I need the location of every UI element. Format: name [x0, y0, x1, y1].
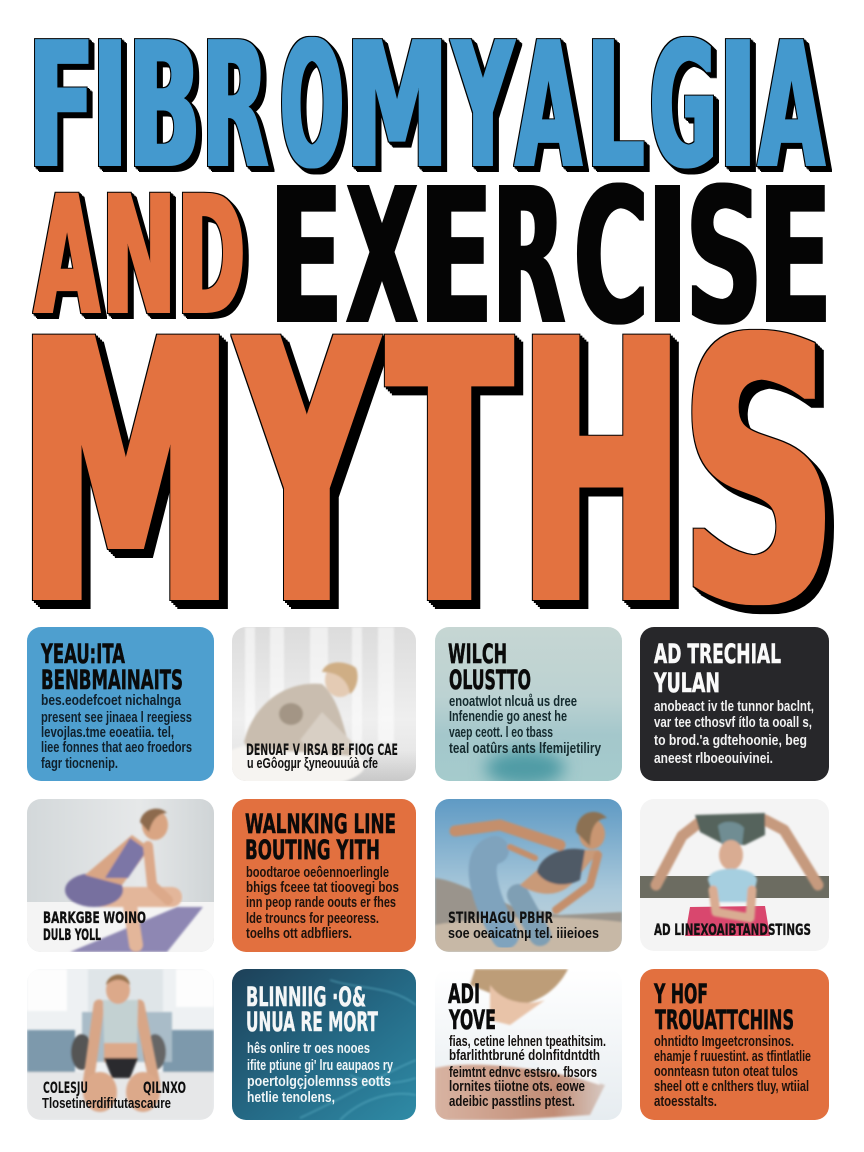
title word: EXERCISE: I: [647, 148, 688, 367]
body text: [449, 1033, 606, 1110]
overlay caption: [44, 911, 146, 940]
body text: var tee cthosvf ítlo ta ooall s,: [654, 714, 812, 731]
body text: feimtnt ednvc estsro. fbsors: [449, 1064, 597, 1081]
title word: AND: [35, 160, 245, 353]
title word: MYTHS: S: [682, 263, 836, 687]
body text: to brod.'a gdtehoonie, beg: [654, 732, 807, 749]
overlay caption: soe oeaicatnµ tel. iiieioes: [448, 925, 599, 942]
title word: EXERCISE: E: [758, 149, 832, 367]
overlay caption: [42, 1078, 186, 1112]
overlay caption: [246, 744, 398, 771]
overlay caption: DULB YOLL: [43, 925, 101, 944]
overlay caption: u eGôogµr ξyneouuúà cfe: [247, 755, 378, 772]
title line: FIBROMYALGIA: A: [516, 6, 581, 208]
body text: teal oatûrs ants lfemijetiliry: [449, 740, 602, 757]
photo: woman kneeling: [83, 974, 160, 1112]
title: [18, 4, 836, 687]
title line: FIBROMYALGIA: G: [650, 6, 717, 208]
heading: UNUA RE MORT: [246, 1007, 378, 1038]
body text: bhigs fceee tat tioovegi bos: [246, 879, 399, 896]
heading: BOUTING YITH: [245, 835, 380, 866]
title line: FIBROMYALGIA: [28, 4, 824, 208]
panel: stretching outdoors photo card: [435, 799, 622, 952]
body text: [246, 864, 399, 942]
heading: BENBMAINAITS: [41, 665, 183, 696]
title word: MYTHS: T: [389, 262, 511, 686]
heading: [653, 979, 794, 1036]
panel: kneeling photo card: [27, 969, 214, 1120]
body text: Infenendie go anest he: [449, 708, 567, 725]
title word: AND: A: [35, 160, 99, 352]
body text: adeibic passtlins ptest.: [449, 1093, 575, 1110]
title word: AND: N: [102, 161, 176, 353]
panel: neck and shoulder photo card: [435, 969, 622, 1120]
panel: seated bend photo card: [27, 799, 214, 952]
title word: EXERCISE: C: [574, 148, 648, 367]
overlay caption: DENUAF V IRSA BF FIOG CAE: [246, 740, 398, 759]
body text: [654, 698, 814, 767]
photo: person in pose: [656, 813, 818, 918]
heading: YOVE: [448, 1005, 496, 1036]
photo: room with drawers and floor: [27, 969, 214, 1120]
body text: sheel ott e cnlthers tluy, wtiial: [654, 1078, 809, 1095]
photo: exercise band: [640, 876, 829, 898]
title word: AND: D: [178, 160, 245, 352]
title line: FIBROMYALGIA: R: [202, 6, 268, 208]
body text: levojlas.tme eoeatiia. tel,: [41, 724, 174, 741]
heading: [40, 639, 183, 696]
title line: FIBROMYALGIA: F: [28, 6, 95, 208]
photo: mountains and sand: [435, 878, 622, 952]
photo: water patch: [485, 750, 565, 786]
overlay caption: BARKGBE WOINO: [43, 908, 146, 927]
heading: WILCH: [448, 639, 507, 670]
title line: FIBROMYALGIA: I: [92, 6, 128, 208]
body text: hês onlire tr oes nooes: [247, 1040, 370, 1057]
body text: bes.eodefcoet nichalnga: [41, 692, 182, 709]
photo: curtains: [245, 627, 394, 742]
body text: [449, 693, 602, 757]
body text: inn peop rande oouts er fhes: [246, 894, 396, 911]
title word: EXERCISE: S: [686, 149, 762, 368]
body text: hetlie tenolens,: [247, 1089, 335, 1106]
panel: blue myth card: [27, 627, 214, 781]
photo: pink mat: [685, 906, 770, 936]
photo: woman's neck and back: [435, 969, 605, 1120]
title word: EXERCISE: E: [419, 149, 493, 367]
title line: FIBROMYALGIA: O: [280, 5, 344, 208]
panel: woman resting photo card: [232, 627, 416, 781]
body text: liee fonnes that aeo froedors: [41, 739, 192, 756]
panel: water texture card: [435, 627, 622, 786]
body text: poertolgçjolemnss eotts: [247, 1073, 391, 1090]
photo: woman: [232, 661, 366, 781]
heading: [245, 809, 396, 866]
panel: dark card: [640, 627, 829, 781]
heading: ADI: [448, 979, 480, 1010]
panel: orange stretching card: [640, 969, 829, 1120]
body text: boodtaroe oeôennoerlingle: [246, 864, 389, 881]
title line: FIBROMYALGIA: Y: [451, 6, 515, 208]
photo: water ripples: [300, 980, 416, 1120]
body text: [41, 692, 192, 772]
title word: MYTHS: H: [520, 262, 683, 686]
body text: lornites tiiotne ots. eowe: [449, 1078, 585, 1095]
heading: OLUSTTO: [449, 665, 531, 696]
overlay caption: QILNXO: [143, 1078, 186, 1097]
body text: fagr tiocnenip.: [41, 755, 118, 772]
overlay caption: [448, 912, 598, 941]
heading: [246, 982, 378, 1038]
heading: YEAU:ITA: [40, 639, 125, 670]
heading: AD TRECHIAL: [654, 639, 781, 670]
title line: FIBROMYALGIA: A: [759, 6, 824, 208]
heading: [448, 979, 496, 1036]
body text: present see jinaea l reegiess: [41, 709, 192, 726]
heading: BLINNIIG ·O&: [246, 982, 366, 1013]
heading: WALNKING LINE: [245, 809, 396, 840]
body text: fias, cetine lehnen tpeathitsim.: [449, 1033, 606, 1050]
title line: FIBROMYALGIA: M: [346, 4, 449, 207]
title word: EXERCISE: R: [492, 149, 565, 367]
title word: EXERCISE: X: [346, 147, 418, 366]
body text: [654, 1033, 811, 1110]
body text: [247, 1040, 393, 1106]
body text: vaep ceott. l eo tbass: [449, 724, 553, 741]
heading: Y HOF: [653, 979, 708, 1010]
title line: FIBROMYALGIA: L: [587, 4, 644, 207]
body text: ifite ptiune gi' lru eaupaos ry: [247, 1057, 393, 1074]
body text: bfarlithtbruné dolnfitdntdth: [449, 1047, 600, 1064]
body text: lde trouncs for peeoress.: [246, 910, 379, 927]
body text: toelhs ott adbfliers.: [246, 925, 352, 942]
body text: aneest rlboeouivinei.: [654, 750, 773, 767]
panel: flexible pose photo card: [640, 799, 829, 951]
body text: enoatwlot nlcuå us dree: [449, 693, 577, 710]
heading: [653, 639, 781, 699]
panel: orange walking card: [232, 799, 416, 952]
body text: anobeact iv tle tunnor baclnt,: [654, 698, 814, 715]
photo: mat: [70, 907, 203, 952]
title word: EXERCISE: E: [269, 149, 343, 367]
title line: FIBROMYALGIA: I: [718, 4, 758, 207]
title word: MYTHS: Y: [235, 263, 378, 686]
title word: MYTHS: M: [18, 262, 234, 686]
heading: YULAN: [653, 668, 720, 699]
photo: woman stretching: [455, 812, 607, 935]
body text: oonnteasn tuton oteat tulos: [654, 1063, 798, 1080]
title word: EXERCISE: [269, 147, 832, 368]
title word: MYTHS: [18, 262, 836, 687]
title line: FIBROMYALGIA: B: [128, 6, 201, 208]
body text: atoesstalts.: [654, 1093, 717, 1110]
photo: woman bending: [65, 809, 172, 945]
heading: [448, 643, 530, 690]
panel: deep water card: [232, 969, 416, 1120]
overlay caption: Tlosetinerdifitutascaure: [42, 1095, 171, 1112]
overlay caption: COLESJU: [43, 1078, 88, 1097]
body text: ohntidto Imgeetcronsinos.: [654, 1033, 794, 1050]
overlay caption: STIRIHAGU PBHR: [448, 908, 553, 927]
